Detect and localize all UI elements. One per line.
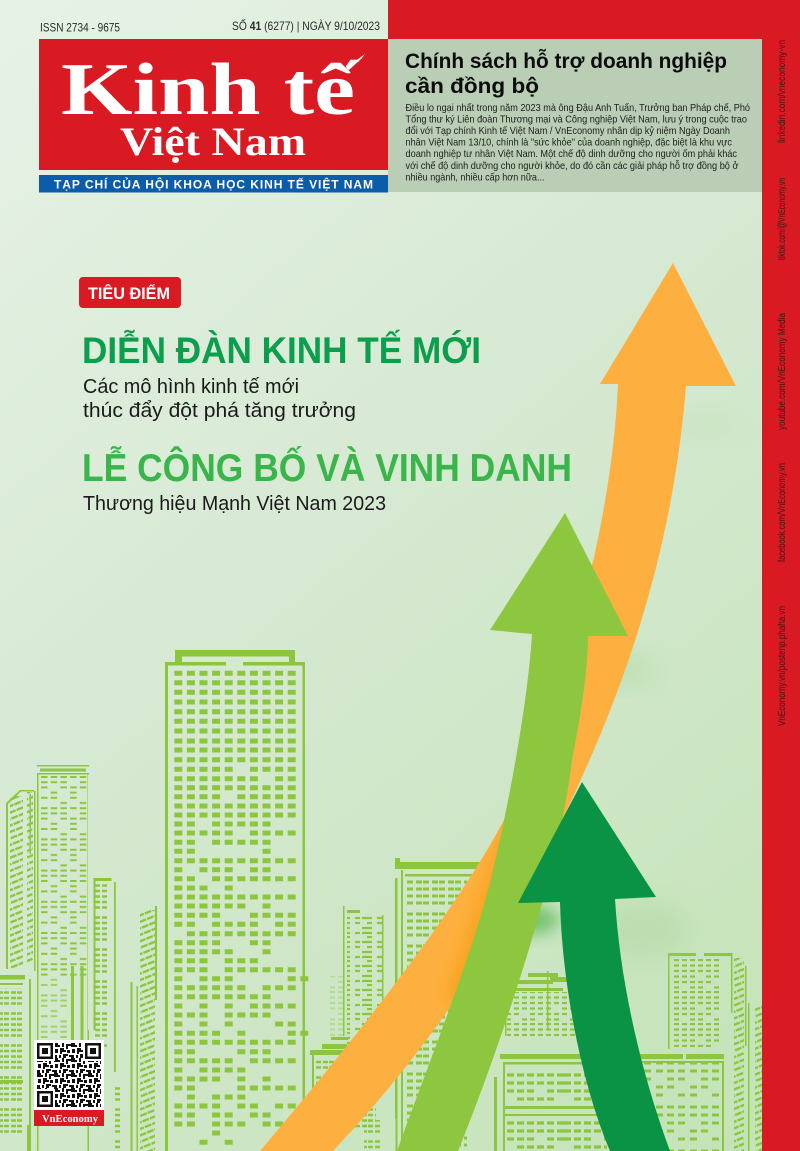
subheading: award name: Thương hiệu Mạnh Việt Nam 2023 bbox=[83, 493, 386, 515]
social media links on side strip bbox=[776, 40, 788, 726]
issue information line bbox=[40, 18, 380, 34]
building: main tower bbox=[165, 650, 308, 1151]
masthead logo bbox=[39, 39, 388, 170]
issue information line: ISSN 2734 - 9675 bbox=[40, 20, 120, 34]
tag: focus bbox=[79, 277, 181, 308]
heading: new economic forum bbox=[82, 329, 481, 422]
building: narrow tower bbox=[94, 878, 121, 1151]
building: right of main tower bbox=[310, 858, 400, 1151]
arrow: orange bbox=[260, 263, 736, 1151]
subheading: forum topic: thúc đẩy đột phá tăng trưởng bbox=[83, 400, 356, 422]
right red side strip bbox=[762, 0, 800, 1151]
top red band bbox=[388, 0, 800, 39]
article summary: đổi với Tạp chính Kinh tế Việt Nam / VnEconomy nhân dịp kỷ niệm Ngày Doanh bbox=[406, 125, 730, 137]
social media links on side strip: VnEconomy.vn/postenp.phaha.vn bbox=[776, 606, 788, 726]
heading: new economic forum: DIỄN ĐÀN KINH TẾ MỚI bbox=[82, 329, 481, 371]
article summary bbox=[406, 102, 750, 184]
article summary: nhân Việt Nam 13/10, chính là "sức khỏe" của doanh nghiệp, đặc biệt là khu vực bbox=[406, 136, 732, 148]
subheading: forum topic bbox=[83, 376, 356, 422]
soft arrow glow bbox=[511, 413, 745, 960]
article summary: nhiều ngành, nhiều cấp hơn nữa... bbox=[406, 172, 544, 184]
article summary: Điều lo ngại nhất trong năm 2023 mà ông Đậu Anh Tuấn, Trưởng ban Pháp chế, Phó bbox=[406, 102, 750, 114]
social media links on side strip: tiktok.com/@VnEconomy.vn bbox=[776, 178, 788, 260]
panel: featured article bbox=[388, 39, 762, 192]
QR code with VnEconomy label bbox=[34, 1040, 104, 1126]
masthead tagline: TẠP CHÍ CỦA HỘI KHOA HỌC KINH TẾ VIỆT NAM bbox=[54, 176, 373, 192]
article summary: với chế độ dinh dưỡng cho người khỏe, do đó cần các giải pháp hỗ trợ đồng bộ ở bbox=[406, 159, 739, 172]
masthead logo: Kinh tế bbox=[61, 49, 360, 131]
tag: focus: TIÊU ĐIỂM bbox=[88, 284, 170, 303]
building: low block right bbox=[640, 1054, 724, 1151]
heading: award ceremony: LỄ CÔNG BỐ VÀ VINH DANH bbox=[82, 445, 572, 490]
building: behind arrows left bbox=[395, 862, 485, 1151]
social media links on side strip: linkedin.com/vneconomy-vn bbox=[776, 40, 788, 143]
masthead logo: Việt Nam bbox=[120, 119, 306, 164]
issue information line: SỐ 41 (6277) | NGÀY 9/10/2023 bbox=[232, 18, 380, 33]
building: second tower bbox=[37, 765, 89, 1151]
city skyline bbox=[0, 650, 762, 1151]
building: slanted tower centre bbox=[130, 906, 157, 1151]
QR code with VnEconomy label: VnEconomy bbox=[42, 1113, 98, 1125]
building: small block centre bbox=[505, 971, 575, 1036]
article summary: Tổng thư ký Liên đoàn Thương mại và Công nghiệp Việt Nam, lưu ý trong cuộc trao bbox=[406, 114, 747, 126]
building: tall right block bbox=[668, 953, 762, 1151]
heading: award ceremony bbox=[82, 445, 572, 515]
building: wide low block bbox=[494, 1054, 615, 1151]
article headline bbox=[405, 49, 727, 98]
subheading: forum topic: Các mô hình kinh tế mới bbox=[83, 376, 299, 398]
article headline: cần đồng bộ bbox=[405, 75, 539, 98]
social media links on side strip: youtube.com/VnEconomy Media bbox=[776, 313, 788, 430]
building: left slanted tower bbox=[6, 790, 36, 971]
social media links on side strip: facebook.com/VnEconomy.vn bbox=[776, 463, 788, 562]
article headline: Chính sách hỗ trợ doanh nghiệp bbox=[405, 49, 727, 73]
arrow: dark green bbox=[518, 782, 670, 1151]
arrow: light green bbox=[397, 513, 628, 1151]
article summary: doanh nghiệp tư nhân Việt Nam. Một chế độ dinh dưỡng cho người ốm phải khác bbox=[406, 148, 737, 160]
building: bottom left block bbox=[0, 975, 31, 1151]
